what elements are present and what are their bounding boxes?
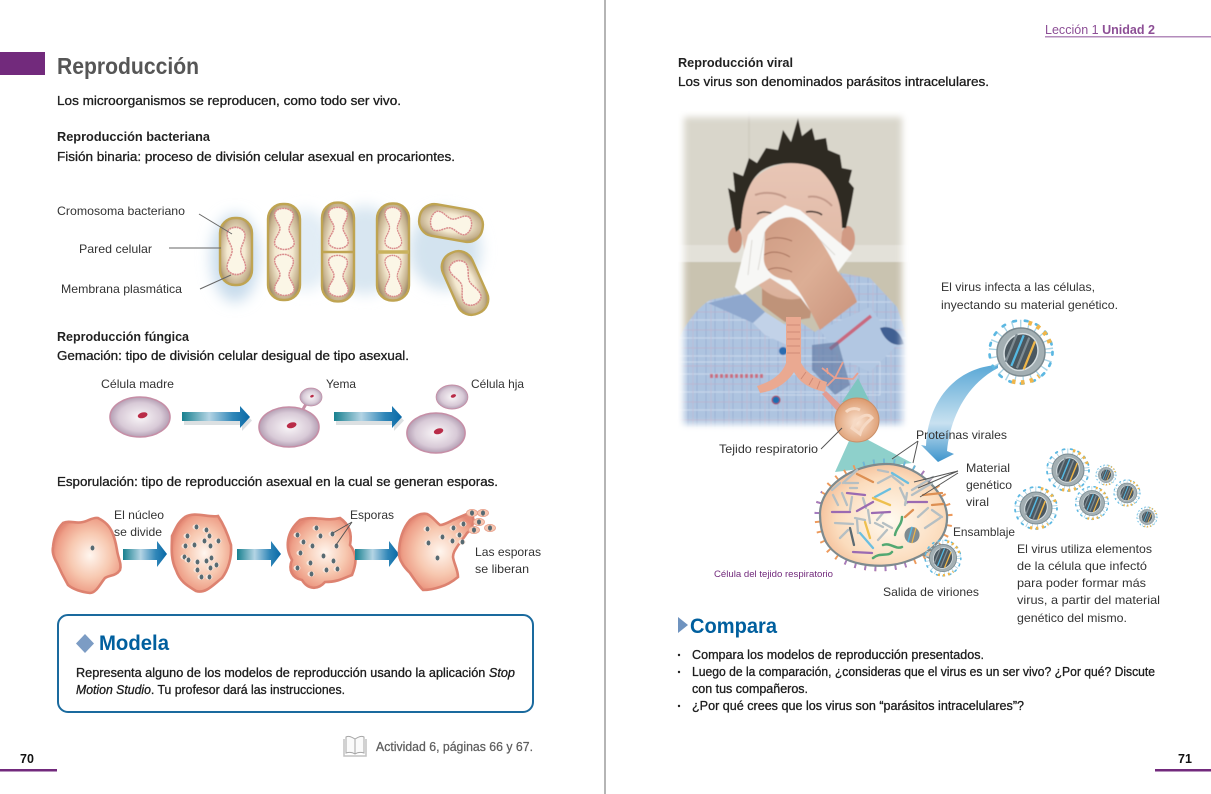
page number 70: 70 <box>20 752 34 766</box>
cell body <box>820 464 947 566</box>
intro text: Los microorganismos se reproducen, como todo ser vivo. <box>57 94 401 108</box>
text: virus uses cell: para poder formar más <box>1017 576 1146 590</box>
section: sporulation text: Esporulación: tipo de reproducción asexual en la cual se generan esporas. <box>57 475 498 489</box>
mother cell <box>110 397 170 437</box>
page number 71: 71 <box>1178 752 1192 766</box>
zoom wedge to cell <box>835 432 912 472</box>
ears <box>728 227 742 253</box>
budding cell <box>259 388 322 447</box>
heading: Compara: Compara <box>690 615 777 638</box>
face <box>740 163 843 299</box>
label: Tejido respiratorio <box>719 428 842 456</box>
section: bacterial reproduction heading: Reproducción bacteriana <box>57 130 211 144</box>
diagram: budding: Célula hja <box>471 377 524 391</box>
icon: book <box>344 736 366 756</box>
text: virus uses cell: de la célula que infectó <box>1017 559 1147 573</box>
text: virus infects <box>941 280 1118 312</box>
section: viral reproduction heading <box>678 56 989 89</box>
diagram: sporulation: se divide <box>114 525 162 539</box>
free virions <box>1015 449 1157 529</box>
label: Tejido respiratorio: Tejido respiratorio <box>719 442 818 456</box>
icon: diamond <box>76 634 94 653</box>
cell 1 <box>53 518 121 593</box>
diagram: budding: Célula madre <box>101 377 174 391</box>
bacterium stage 1 <box>220 218 252 285</box>
bacterium stage 5: separated cells <box>417 202 493 320</box>
labels with leader lines <box>57 204 232 296</box>
text: virus uses cell: El virus utiliza elementos <box>1017 542 1152 556</box>
neck <box>762 288 812 322</box>
tissue section <box>835 398 879 442</box>
diagram: sporulation: se liberan <box>475 562 529 576</box>
labels: cell parts: viral <box>966 495 989 509</box>
panel: Modela callout <box>58 615 533 712</box>
section: bacterial reproduction heading: Fisión binaria: proceso de división celular asexual en procariontes. <box>57 150 455 164</box>
callout body text: Motion Studio. Tu profesor dará las instrucciones. <box>76 683 345 697</box>
section: fungal reproduction heading: Reproducción fúngica <box>57 330 190 344</box>
arrow 3 <box>355 541 399 567</box>
text: virus uses cell <box>1017 542 1160 625</box>
diagram: sporulation: Las esporas <box>475 545 541 559</box>
cell 3 <box>288 508 394 588</box>
photo: boy blowing nose <box>678 111 910 437</box>
curved arrow <box>921 365 998 462</box>
bronchioles <box>822 362 858 386</box>
illustration: infected cell <box>820 464 961 576</box>
footer reference: activity <box>344 736 533 756</box>
section: viral reproduction heading: Reproducción viral <box>678 56 793 70</box>
labels with leader lines: Pared celular <box>79 242 152 256</box>
labels: cell parts: Salida de viriones <box>883 585 979 599</box>
text: virus uses cell: virus, a partir del material <box>1017 593 1160 607</box>
right page header: Lección 1 Unidad 2 <box>1045 23 1155 37</box>
page number 71 <box>1155 752 1211 772</box>
labels: cell parts: genético <box>966 478 1012 492</box>
section: Compara <box>678 615 1155 713</box>
callout body text: Representa alguno de los modelos de reproducción usando la aplicación Stop <box>76 666 515 680</box>
text: virus infects: El virus infecta a las células, <box>941 280 1095 294</box>
labels: cell parts <box>714 428 1015 599</box>
panel: left page header <box>0 52 199 79</box>
section: fungal reproduction heading: Gemación: tipo de división celular desigual de tipo asexual. <box>57 349 409 363</box>
labels: cell parts: Ensamblaje <box>953 525 1015 539</box>
genetic fragments <box>832 470 943 558</box>
hair <box>728 118 854 232</box>
section: bacterial reproduction heading <box>57 130 455 164</box>
exiting virion <box>925 540 961 576</box>
bullet list: Luego de la comparación, ¿consideras que el virus es un ser vivo? ¿Por qué? Discute <box>692 665 1155 679</box>
heading: Modela: Modela <box>99 632 169 655</box>
bullet list <box>678 648 1155 713</box>
footer reference: activity: Actividad 6, páginas 66 y 67. <box>376 740 533 754</box>
arrow 2 <box>237 541 281 567</box>
bullet list: ¿Por qué crees que los virus son “parásitos intracelulares”? <box>692 699 1024 713</box>
section: fungal reproduction heading <box>57 330 409 363</box>
labels with leader lines: Cromosoma bacteriano <box>57 204 185 218</box>
hand <box>764 217 857 330</box>
diagram: budding: Yema <box>326 377 356 391</box>
bacterium stage 4 <box>377 204 409 300</box>
arrow 2 <box>334 406 404 431</box>
text: virus uses cell: genético del mismo. <box>1017 611 1127 625</box>
bacterium stage 3 <box>322 203 354 301</box>
cell 3: Esporas <box>350 508 394 522</box>
bullet list: con tus compañeros. <box>692 682 808 696</box>
zoom wedge top <box>842 378 870 402</box>
text: virus infects: inyectando su material genético. <box>941 298 1118 312</box>
arrow 1 <box>123 541 167 567</box>
assembling virion <box>903 525 921 545</box>
cell 2 <box>172 515 231 592</box>
labels: cell parts: Célula del tejido respiratorio <box>714 569 833 579</box>
surface proteins <box>820 464 947 566</box>
diagram: budding <box>101 377 524 453</box>
heading: Reproducción: Reproducción <box>57 53 199 79</box>
labels: cell parts: Proteínas virales <box>916 428 1007 442</box>
shirt <box>678 273 910 437</box>
trachea <box>757 317 827 393</box>
diagram: sporulation <box>53 508 541 593</box>
labels with leader lines: Membrana plasmática <box>61 282 182 296</box>
section: viral reproduction heading: Los virus son denominados parásitos intracelulares. <box>678 75 989 89</box>
tissue <box>735 205 852 313</box>
diagram: sporulation: El núcleo <box>114 508 164 522</box>
arrow 1 <box>182 406 252 431</box>
diagram: binary fission <box>57 202 493 320</box>
page number 70 <box>0 752 57 772</box>
daughter cells <box>407 385 468 453</box>
bud neck with exiting virion <box>922 548 940 560</box>
bacterium stage 2 <box>268 204 300 300</box>
big virus <box>990 320 1052 384</box>
cell 4 releasing spores <box>399 509 496 590</box>
bullet list: Compara los modelos de reproducción presentados. <box>692 648 984 662</box>
callout body text <box>76 666 515 697</box>
icon: triangle <box>678 617 688 633</box>
labels: cell parts: Material <box>966 461 1010 475</box>
illustration: respiratory tract <box>757 317 912 472</box>
